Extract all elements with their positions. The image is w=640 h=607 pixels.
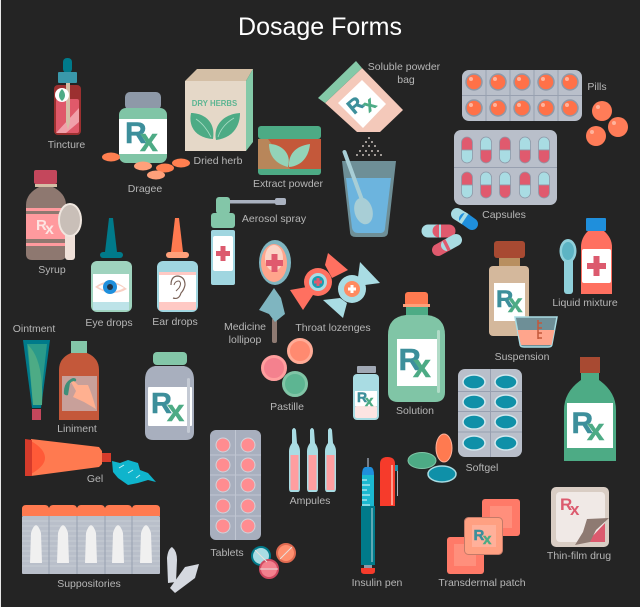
label: Suppositories xyxy=(57,578,121,590)
icon: suppository strip xyxy=(22,505,160,574)
icon: suspension bottle xyxy=(489,241,529,336)
icon: pastilles xyxy=(262,340,312,396)
icon: syrup bottle: R xyxy=(36,217,47,234)
icon: loose pills xyxy=(586,101,628,146)
panel: eye drops xyxy=(85,218,133,329)
icon: large green bottle: R xyxy=(572,407,594,440)
icon: loose tablets xyxy=(252,544,295,578)
panel: suppositories xyxy=(22,505,199,593)
icon: gray Rx bottle: R xyxy=(151,388,172,420)
label: Capsules xyxy=(482,209,526,221)
label: Dried herb xyxy=(193,155,243,167)
panel: soluble powder bag xyxy=(318,61,441,156)
label: lollipop xyxy=(229,334,261,346)
icon: loose suppositories xyxy=(167,547,199,593)
icon: suspension bottle: R xyxy=(496,286,513,313)
icon: spray bottle xyxy=(211,197,286,285)
icon: gray Rx bottle xyxy=(145,352,194,440)
icon: pen cap xyxy=(380,457,398,506)
label: Throat lozenges xyxy=(295,322,371,334)
icon: small vial xyxy=(353,366,379,420)
icon: powder bag: R xyxy=(343,92,369,119)
icon: suspension bottle: x xyxy=(508,288,523,318)
panel: medicine lollipop xyxy=(224,240,291,346)
panel: tablets xyxy=(210,430,295,578)
icon: film xyxy=(551,487,609,547)
icon: solution bottle: x xyxy=(413,348,431,384)
panel: syrup xyxy=(26,170,81,276)
panel: pastille xyxy=(262,340,312,413)
icon: solution bottle xyxy=(388,292,445,402)
icon: tablets blister xyxy=(210,430,261,540)
panel: solution xyxy=(388,292,445,417)
icon: film: x xyxy=(570,500,580,519)
panel: aerosol spray xyxy=(211,197,307,285)
icon: lollipop xyxy=(259,240,291,343)
panel: gel xyxy=(25,439,156,485)
icon: blue lozenge xyxy=(323,262,380,318)
panel: liniment xyxy=(57,341,99,435)
label: Tincture xyxy=(48,139,85,151)
panel: thin-film drug xyxy=(547,487,611,562)
label: bag xyxy=(397,74,415,86)
icon: herb box: DRY HERBS xyxy=(192,99,237,108)
icon: squeezed gel xyxy=(112,460,156,485)
icon: loose capsules xyxy=(428,214,472,250)
panel: throat lozenges xyxy=(290,253,380,334)
icon: patches xyxy=(447,499,520,574)
icon: jar xyxy=(258,126,321,175)
icon: capsules blister xyxy=(454,130,557,205)
label: Insulin pen xyxy=(352,577,403,589)
label: Pills xyxy=(587,81,607,93)
icon: syrup spoon xyxy=(59,204,81,260)
label: Tablets xyxy=(210,547,244,559)
icon: mixture bottle xyxy=(581,218,612,294)
label: Syrup xyxy=(38,264,66,276)
icon: gel tube xyxy=(25,439,111,476)
icon: solution bottle: R xyxy=(398,342,421,377)
panel: liquid mixture xyxy=(552,218,618,309)
icon: small vial: x xyxy=(365,393,374,410)
label: Suspension xyxy=(495,351,550,363)
label: Medicine xyxy=(224,321,266,333)
icon: dragee bottle: R xyxy=(125,117,147,150)
label: Gel xyxy=(87,473,103,485)
panel: dried herb xyxy=(185,69,253,167)
icon: syrup bottle xyxy=(26,170,66,260)
icon: dragee bottle xyxy=(102,92,190,180)
icon: large green bottle: x xyxy=(587,412,605,447)
icon: glass with spoon xyxy=(342,152,396,237)
icon: ear drops bottle xyxy=(157,218,198,312)
icon: softgel blister xyxy=(458,369,522,457)
panel: ampules xyxy=(289,428,336,507)
icon: small vial: R xyxy=(357,389,367,405)
icon: orange lozenge xyxy=(290,253,348,310)
icon: patches: R xyxy=(474,527,484,544)
panel: tincture xyxy=(48,58,85,151)
icon: powder bag xyxy=(318,61,403,156)
label: Aerosol spray xyxy=(242,213,307,225)
label: Pastille xyxy=(270,401,304,413)
panel: softgel xyxy=(408,369,522,482)
icon: film: R xyxy=(560,495,572,514)
icon: ointment tube xyxy=(23,340,50,420)
icon: dragee bottle: x xyxy=(140,122,158,158)
icon: eye drops bottle xyxy=(91,218,132,312)
panel: transdermal patch xyxy=(438,499,526,589)
label: Softgel xyxy=(466,462,498,474)
icon: falling powder xyxy=(356,137,382,156)
label: Ear drops xyxy=(152,316,198,328)
label: Eye drops xyxy=(85,317,133,329)
icon: powder bag: x xyxy=(358,93,381,117)
label: Ointment xyxy=(13,323,55,335)
label: Thin-film drug xyxy=(547,550,611,562)
panel: pills xyxy=(462,70,628,146)
panel: dragee xyxy=(102,92,190,195)
label: Extract powder xyxy=(253,178,324,190)
panel: ointment xyxy=(13,323,55,420)
icon: gray Rx bottle: x xyxy=(167,393,185,428)
icon: measuring beaker xyxy=(515,317,557,347)
icon: patches: x xyxy=(483,531,492,548)
label: Dragee xyxy=(128,183,162,195)
icon: liniment bottle xyxy=(59,341,99,420)
icon: ampules xyxy=(289,428,336,492)
icon: pen xyxy=(361,458,375,574)
label: Soluble powder xyxy=(368,61,441,73)
label: Liniment xyxy=(57,423,97,435)
panel: suspension xyxy=(489,241,557,363)
panel: insulin pen xyxy=(352,457,403,589)
label: Liquid mixture xyxy=(552,297,618,309)
icon: syrup bottle: x xyxy=(45,221,54,238)
icon: mixture spoon xyxy=(560,239,576,294)
icon: pills blister xyxy=(462,70,582,121)
panel: ear drops xyxy=(152,218,198,328)
icon: loose softgels xyxy=(408,434,456,482)
label: Ampules xyxy=(290,495,330,507)
title: Dosage Forms xyxy=(238,13,402,41)
panel: capsules xyxy=(428,130,557,250)
label: Solution xyxy=(396,405,434,417)
icon: tincture bottle xyxy=(54,58,81,135)
panel: extract powder xyxy=(253,126,324,190)
icon: large green bottle xyxy=(564,357,616,461)
label: Transdermal patch xyxy=(438,577,526,589)
